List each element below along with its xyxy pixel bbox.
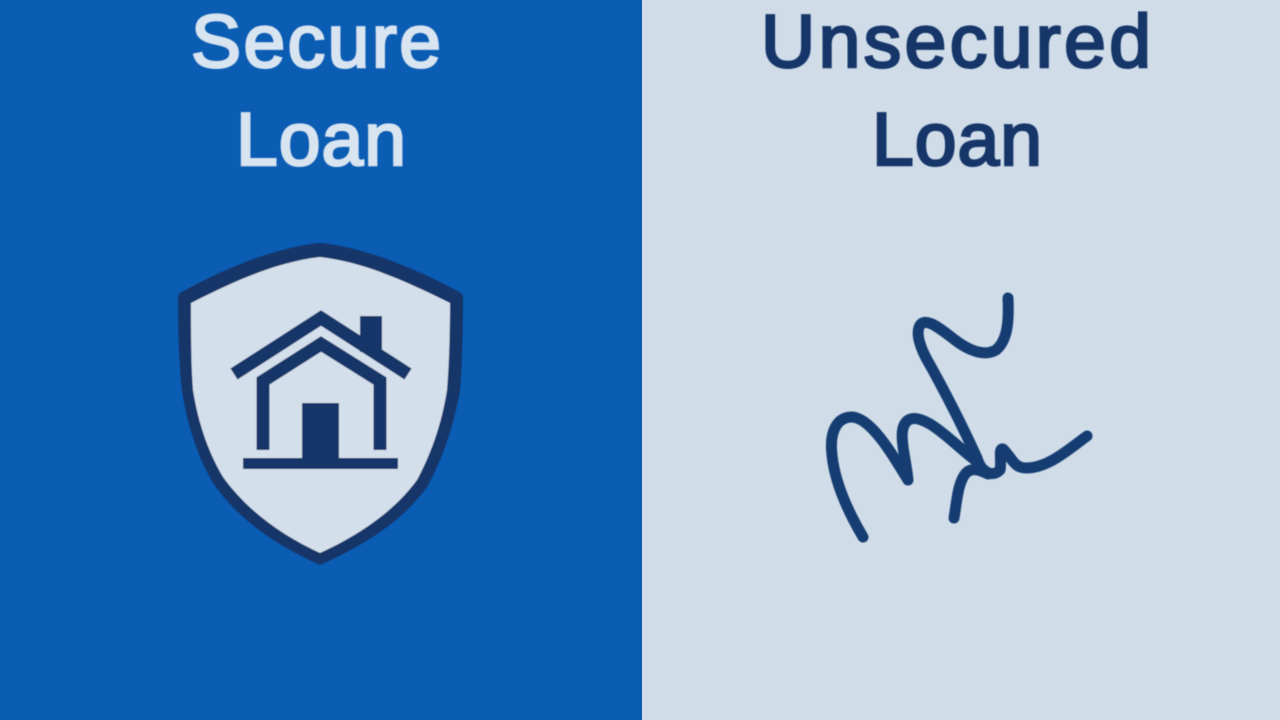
heading: Unsecured Loan: Loan: [872, 97, 1042, 181]
signature third stroke: [954, 470, 988, 518]
walls: [263, 344, 380, 450]
chimney: [360, 316, 382, 352]
shield inner fill: [191, 257, 450, 553]
roof: [234, 318, 408, 374]
icon: shield with house: [178, 243, 463, 565]
panel: secure loan: [0, 0, 642, 720]
heading: Unsecured Loan: Unsecured: [761, 0, 1151, 83]
panel background: blue: [0, 0, 642, 720]
panel background: pale blue: [642, 0, 1280, 720]
heading: Secure Loan: [191, 0, 441, 181]
shield outline: [178, 243, 463, 565]
heading: Unsecured Loan: [761, 0, 1151, 181]
ground line: [243, 458, 398, 469]
heading: Secure Loan: Loan: [236, 97, 406, 181]
signature first stroke: [831, 417, 975, 537]
door: [302, 403, 339, 460]
icon: signature: [831, 298, 1087, 537]
house icon: [234, 316, 408, 469]
panel: unsecured loan: [642, 0, 1280, 720]
signature second stroke: [918, 298, 1087, 474]
heading: Secure Loan: Secure: [191, 0, 441, 83]
